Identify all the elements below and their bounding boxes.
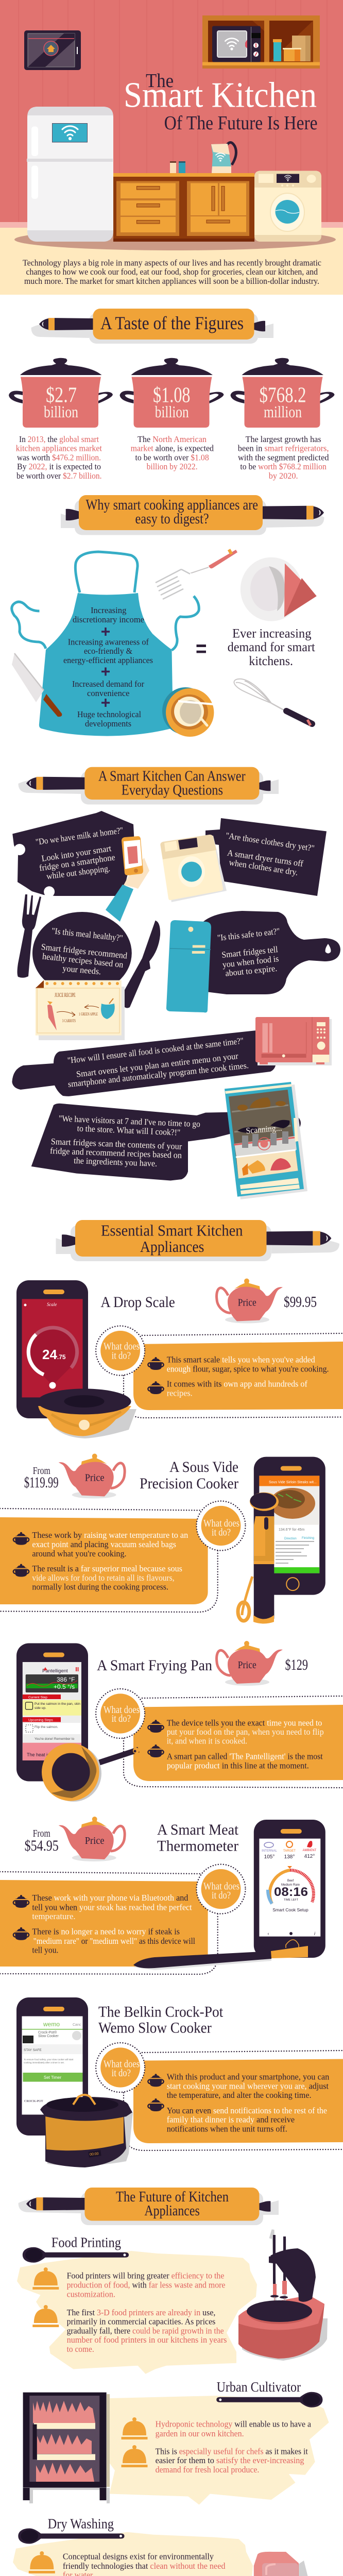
heading: Essential Smart Kitchen Appliances: Appliances — [140, 1238, 204, 1256]
price teapot — [217, 1279, 317, 1323]
icon: wall shelf with microwave — [202, 15, 320, 69]
price teapot: $129 — [285, 1656, 308, 1673]
list: demand factors — [63, 605, 153, 728]
icon: hand holding phone — [106, 836, 149, 922]
phone: pantelligent app — [16, 1643, 139, 1802]
phone: wemo app: CROCK-POT — [24, 2099, 43, 2103]
list: demand factors: Increased demand for — [72, 679, 144, 689]
caption: north america — [131, 434, 214, 471]
phone: scale app — [16, 1280, 136, 1438]
phone: sous vide app: Sous Vide Sirloin Steaks wit... — [269, 1481, 317, 1484]
icon: scale bowl — [37, 1388, 136, 1438]
panel: Urban Cultivator — [23, 2379, 329, 2505]
caption: global market: By 2022, it is expected to — [17, 462, 101, 471]
text: food printing: The first 3-D food printers are already in use, — [67, 2308, 215, 2317]
question: visitors: the ingredients you have. — [74, 1156, 157, 1168]
text: urban cultivator: demand for fresh local produce. — [156, 2465, 259, 2475]
list: sous vide features: normally lost during the cooking process. — [32, 1582, 168, 1592]
pot: 2.7 billion: $2.7 — [46, 384, 77, 408]
question: safe to eat: you when food is — [222, 954, 279, 970]
appliance title — [98, 2003, 224, 2036]
price teapot: From — [33, 1465, 50, 1477]
question: safe to eat — [166, 911, 340, 1012]
appliance title: Thermometer — [157, 1838, 238, 1855]
phone: pantelligent app: Pantelligent — [42, 1668, 68, 1674]
recipe card — [36, 980, 125, 1040]
price teapot: Price — [238, 1659, 256, 1671]
bubble: what does it do — [197, 1865, 245, 1914]
question: visitors: Smart fridges scan the contents of your — [50, 1137, 182, 1151]
phone: pantelligent app: Current Step — [28, 1696, 47, 1699]
question: healthy meal — [32, 912, 132, 1040]
list: sous vide features: exact point and placing vacuum sealed bags — [32, 1539, 176, 1549]
caption: north america: to be worth over $1.08 — [135, 452, 209, 463]
icon: apron — [12, 552, 199, 736]
list: demand factors: Increasing — [91, 605, 127, 615]
phone: sous vide app: 134.6°F for 45m — [279, 1528, 304, 1532]
list: slow cooker features: family that dinner is ready and receive — [167, 2115, 295, 2125]
text: food printing: gradually fall, there could be rapid growth in the — [67, 2326, 224, 2335]
heading: Why smart cooking appliances — [61, 495, 324, 535]
text: food printing: customization. — [67, 2290, 115, 2299]
caption: refrigerators — [238, 434, 329, 481]
icon: red oven — [255, 1017, 332, 1065]
icon: frying pan — [42, 1743, 139, 1802]
list: sous vide features — [13, 1530, 188, 1592]
list: slow cooker features: notifications when the unit turns off. — [167, 2124, 287, 2133]
phone: pantelligent app: Upcoming Steps — [28, 1719, 53, 1722]
bubble: what does it do: What does — [203, 1518, 239, 1529]
icon: whisk — [234, 679, 312, 725]
details panel — [0, 1880, 208, 1967]
caption: global market: was worth $476.2 million. — [17, 452, 101, 463]
caption: north america: billion by 2022. — [147, 462, 198, 471]
list: thermometer features — [13, 1893, 195, 1955]
panel: A Smart Frying Pan — [16, 1641, 343, 1802]
pot: 768.2 million — [231, 358, 335, 428]
panel: Dry Washing: Dry Washing — [48, 2516, 114, 2532]
list: slow cooker features: the temperature, and alter the cooking time. — [167, 2090, 311, 2100]
text: food printing: Food printers will bring greater efficiency to the — [67, 2271, 224, 2281]
phone: scale app: 24.75 — [42, 1347, 66, 1362]
price teapot: From — [33, 1828, 50, 1839]
list: slow cooker features: start cooking your meal wherever you are, adjust — [167, 2081, 329, 2091]
phone: wemo app: Set Timer — [44, 2075, 61, 2080]
caption: refrigerators: to be worth $768.2 million — [240, 462, 327, 471]
intro text: changes to how we cook our food, eat our food, shop for groceries, clean our kitchen, and — [26, 267, 318, 277]
phone: thermometer app: 138° — [284, 1854, 295, 1860]
price teapot — [217, 1641, 308, 1686]
question: healthy meal: "Is this meal healthy?" — [51, 926, 124, 943]
panel: Belkin Crock-Pot — [16, 1997, 343, 2167]
question: clothes dry: when clothes are dry. — [228, 857, 299, 877]
price teapot: $54.95 — [25, 1837, 59, 1854]
recipe card: 3 CARROTS — [62, 1019, 76, 1023]
question: milk: Look into your smart — [41, 843, 112, 863]
text: urban cultivator: garden in our own kitchen. — [156, 2429, 244, 2438]
heading: A Smart Kitchen Can Answer: A Smart Kitchen Can Answer — [98, 769, 246, 785]
caption: refrigerators: been in smart refrigerators, — [238, 444, 329, 453]
caption: global market: In 2013, the global smart — [19, 434, 99, 444]
details panel — [133, 1705, 343, 1781]
phone: thermometer app: Medium Rare — [281, 1884, 300, 1887]
list: thermometer features: tell you. — [32, 1945, 58, 1955]
phone: wemo app: cooking immediately after a timer is set. — [24, 2061, 64, 2064]
list: demand factors: eco-friendly & — [84, 646, 132, 656]
price teapot — [25, 1817, 125, 1861]
list: slow cooker features: You can even send notifications to the rest of the — [167, 2106, 327, 2115]
heading: Essential Smart Kitchen Appliances — [56, 1220, 339, 1261]
appliance title: A Smart Meat — [157, 1821, 239, 1838]
question: clothes dry: A smart dryer turns off — [227, 848, 304, 869]
list: sous vide features: around what you're cooking. — [32, 1549, 127, 1558]
phone: pantelligent app: side up. — [35, 1706, 46, 1710]
bubble: what does it do — [96, 1689, 145, 1738]
question: milk: "Do we have milk at home?" — [35, 825, 124, 847]
recipe card: JUICE RECIPE — [55, 991, 76, 998]
bubble: what does it do: it do? — [212, 1890, 231, 1901]
text: urban cultivator: Hydroponic technology will enable us to have a — [156, 2419, 311, 2429]
phone: wemo app: Canc — [73, 2023, 81, 2027]
bubble: what does it do: What does — [104, 2059, 140, 2070]
caption: north america: market alone, is expected — [131, 444, 214, 453]
question: cooked at same time: Smart ovens let you plan an entire menu on your — [76, 1051, 239, 1079]
phone: thermometer app: 105° — [264, 1854, 275, 1860]
list: thermometer features: tell you when your steak has reached the perfect — [32, 1902, 192, 1912]
icon: table knife — [121, 921, 160, 1008]
caption: refrigerators: by 2020. — [269, 471, 298, 481]
heading: Why smart cooking appliances: Why smart cooking appliances are — [85, 497, 258, 513]
list: demand factors: developments — [85, 719, 131, 728]
icon: food printer — [238, 2230, 328, 2361]
list: drop scale features — [148, 1354, 329, 1398]
text: food printing: primarily in commercial capacities. As prices — [67, 2317, 215, 2327]
phone: thermometer app: TIME LEFT — [284, 1899, 299, 1902]
question: healthy meal: healthy recipes based on — [42, 951, 124, 970]
list: frying pan features: put your food on the pan, when you need to flip — [167, 1727, 324, 1737]
bubble: what does it do: What does — [203, 1880, 239, 1892]
list: demand factors: convenience — [87, 688, 130, 698]
question: visitors: fridge and recommend recipes based on — [50, 1146, 182, 1160]
list: frying pan features: it, and when it is cooked. — [167, 1736, 247, 1745]
question: safe to eat: Smart fridges tell — [221, 944, 279, 960]
pot: 768.2 million: million — [264, 402, 302, 421]
bubble: what does it do: it do? — [112, 1713, 131, 1724]
heading: A Taste of the Figures: A Taste of the Figures — [100, 313, 244, 333]
phone: pantelligent app: You're done! Remember to — [35, 1737, 75, 1741]
panel: Urban Cultivator: Urban Cultivator — [217, 2379, 301, 2395]
heading: The Future of Kitchen Appliances: Appliances — [144, 2203, 200, 2219]
list: frying pan features: popular product in this line at the moment. — [167, 1760, 309, 1770]
pot: 1.08 billion: billion — [155, 402, 189, 421]
heading: The Future of Kitchen Appliances — [19, 2188, 279, 2225]
bubble: what does it do: it do? — [112, 2067, 131, 2079]
icon: slow cooker — [40, 2095, 133, 2167]
text: dry washing — [63, 2552, 226, 2576]
phone: sous vide app: Direction — [284, 1537, 297, 1540]
title: Smart Kitchen — [124, 76, 317, 115]
phone: pantelligent app: 386 °F — [57, 1676, 75, 1683]
heading: A Smart Kitchen Can Answer: Everyday Questions — [122, 782, 223, 799]
caption: global market — [16, 434, 102, 481]
phone: thermometer app: i — [314, 1931, 316, 1936]
bubble: what does it do: it do? — [112, 1350, 131, 1361]
text: urban cultivator — [156, 2419, 311, 2475]
icon: knife — [12, 653, 62, 717]
list: demand factors: Huge technological — [77, 709, 141, 719]
bubble: what does it do: What does — [104, 1341, 140, 1352]
panel: A Drop Scale — [16, 1279, 343, 1438]
phone: pantelligent app: The heat is — [27, 1752, 50, 1757]
pot: 768.2 million: $768.2 — [260, 384, 306, 408]
intro text — [23, 258, 321, 286]
bubble: what does it do — [96, 2043, 145, 2092]
details panel — [133, 1342, 343, 1410]
list: thermometer features: There is no longer a need to worry if steak is — [32, 1927, 180, 1937]
price teapot: Price — [85, 1472, 105, 1483]
question: clothes dry — [160, 818, 327, 902]
list: sous vide features: vide allows for food to retain all its flavours, — [32, 1573, 175, 1583]
panel: figure pots — [9, 358, 335, 481]
bubble: what does it do — [96, 1326, 145, 1376]
panel: A Smart Meat Thermometer — [0, 1817, 325, 1974]
price teapot: Price — [85, 1835, 105, 1846]
phone: wemo app: STAY SAFE — [24, 2048, 42, 2052]
intro text: much more. The market for smart kitchen appliances will soon be a billion-dollar industry. — [24, 276, 319, 286]
question: cooked at same time: smartphone and automatically program the cook times. — [67, 1060, 249, 1089]
list: slow cooker features: With this product and your smartphone, you can — [167, 2072, 330, 2082]
list: demand factors: energy-efficient appliances — [63, 655, 153, 665]
list: sous vide features: These work by raising water temperature to an — [32, 1530, 188, 1540]
appliance title: Wemo Slow Cooker — [98, 2020, 212, 2036]
phone: sous vide app: Finishing — [302, 1537, 314, 1540]
text: food printing: to come. — [67, 2344, 94, 2354]
result text: Ever increasing — [232, 627, 312, 641]
pot: 2.7 billion: billion — [44, 402, 78, 421]
icon: wall tablet — [24, 30, 81, 70]
phone: scale app: Scale — [47, 1302, 57, 1307]
question: healthy meal: Smart fridges recommend — [41, 942, 128, 961]
text: urban cultivator: This is especially useful for chefs as it makes it — [156, 2446, 308, 2456]
text: dry washing: friendly technologies that clean without the need — [63, 2561, 226, 2571]
question: milk: while out shopping. — [46, 863, 111, 882]
icon: slow cooker: 00:00 — [90, 2152, 99, 2157]
phone: pantelligent app: Flip the salmon. — [35, 1725, 58, 1729]
icon: cup on saucer — [162, 687, 214, 737]
question: visitors — [31, 1082, 307, 1199]
bubble: what does it do — [197, 1501, 245, 1551]
icon: scanning fridge — [225, 1082, 307, 1199]
heading: Why smart cooking appliances: easy to digest? — [135, 511, 209, 527]
heading: A Smart Kitchen Can Answer — [19, 767, 279, 805]
icon: plate with napkin — [241, 557, 317, 621]
list: demand factors: Increasing awareness of — [68, 637, 149, 647]
phone: thermometer app — [133, 1820, 325, 1970]
appliance title — [140, 1459, 238, 1492]
phone: thermometer app: TARGET — [283, 1850, 296, 1853]
appliance title: Precision Cooker — [140, 1475, 238, 1492]
list: slow cooker features — [148, 2072, 330, 2133]
pot: 1.08 billion: $1.08 — [153, 384, 191, 408]
phone: wemo app: To ensure food safety, your slow cooker will start — [24, 2058, 74, 2061]
pot: 2.7 billion — [9, 358, 113, 428]
icon: scanning fridge: Scanning... — [246, 1123, 282, 1136]
icon: immersion cooker — [238, 1493, 279, 1624]
icon: spatula — [156, 549, 237, 600]
result text — [228, 627, 315, 668]
heading: Essential Smart Kitchen Appliances: Essential Smart Kitchen — [101, 1222, 243, 1240]
phone: sous vide app — [238, 1457, 325, 1624]
phone: thermometer app: Smart Cook Setup — [272, 1907, 308, 1912]
price teapot — [24, 1454, 125, 1498]
panel: Food Printing: Food Printing — [52, 2235, 121, 2250]
appliance title — [157, 1821, 239, 1855]
panel: A Sous Vide Precision Cooker — [0, 1454, 325, 1624]
question: safe to eat: about to expire. — [225, 963, 278, 978]
appliance title: The Belkin Crock-Pot — [98, 2003, 224, 2020]
list: thermometer features: These work with your phone via Bluetooth and — [32, 1893, 188, 1903]
icon: dryer — [160, 835, 227, 902]
phone: thermometer app: ‹ — [268, 1931, 269, 1936]
bubble: what does it do: What does — [104, 1704, 140, 1716]
caption: refrigerators: with the segment predicted — [238, 452, 329, 463]
phone: wemo app — [16, 1997, 133, 2167]
question: milk: fridge on a smartphone — [39, 852, 116, 873]
list: drop scale features: enough flour, sugar, spice to what you're cooking. — [167, 1364, 329, 1374]
caption: global market: kitchen appliances market — [16, 444, 102, 453]
details panel — [133, 2059, 343, 2143]
question: cooked at same time — [12, 1017, 332, 1096]
hero kitchen scene — [0, 0, 343, 295]
panel: Dry Washing — [13, 2516, 331, 2576]
phone: thermometer app: INTERNAL — [262, 1850, 277, 1853]
caption: refrigerators: The largest growth has — [246, 434, 321, 444]
phone: wemo app: Crock-Pot® — [38, 2030, 57, 2035]
text: urban cultivator: easier for them to satisfy the ever-increasing — [156, 2455, 304, 2465]
list: thermometer features: "medium rare" or "medium well" as this device will — [33, 1936, 195, 1946]
phone: wemo app: wemo — [43, 2021, 60, 2028]
icon: meat probe — [133, 1946, 308, 1970]
phone: pantelligent app: +0.5 °/s — [54, 1683, 75, 1690]
price teapot: $119.99 — [24, 1474, 59, 1491]
list: thermometer features: temperature. — [32, 1911, 76, 1921]
list: drop scale features: It comes with its own app and hundreds of — [167, 1379, 307, 1389]
text: food printing: production of food, with far less waste and more — [67, 2280, 226, 2290]
text: food printing: number of food printers in our kitchens in years — [67, 2335, 227, 2345]
icon: blue fridge — [166, 920, 211, 1012]
list: drop scale features: recipes. — [167, 1388, 193, 1398]
icon: pink cubes — [226, 2552, 331, 2576]
appliance title: A Sous Vide — [169, 1459, 238, 1476]
question: safe to eat: "Is this safe to eat?" — [217, 926, 280, 943]
list: drop scale features: This smart scale tells you when you've added — [167, 1354, 315, 1364]
question: clothes dry: "Are those clothes dry yet?" — [225, 831, 315, 853]
caption: north america: The North American — [138, 434, 207, 444]
title: The — [146, 70, 174, 92]
caption: global market: be worth over $2.7 billion. — [16, 471, 102, 481]
title — [124, 70, 318, 134]
pot: 1.08 billion — [119, 358, 224, 428]
text: dry washing: Conceptual designs exist for environmentally — [63, 2552, 214, 2562]
question: milk — [12, 811, 149, 922]
result text: demand for smart — [228, 640, 315, 654]
icon: washing machine — [254, 171, 321, 242]
heading: A Taste of the Figures — [31, 309, 273, 344]
question: cooked at same time: "How will I ensure all food is cooked at the same time?" — [67, 1036, 244, 1065]
panel: Food Printing — [17, 2230, 328, 2374]
phone: pantelligent app: Put the salmon in the pan, skin — [35, 1702, 80, 1706]
list: frying pan features — [148, 1718, 324, 1770]
phone: wemo app: Slow Cooker — [38, 2035, 59, 2038]
equals sign — [197, 645, 206, 653]
phone: thermometer app: Beef — [287, 1879, 294, 1883]
panel: everyday questions — [12, 811, 340, 1199]
icon: fork — [18, 894, 41, 978]
list: frying pan features: The device tells you the exact time you need to — [167, 1718, 322, 1727]
appliance title: A Smart Frying Pan — [97, 1657, 212, 1674]
list: frying pan features: A smart pan called 'The Pantelligent' is the most — [167, 1752, 323, 1761]
question: visitors: to the store. What will I cook?!" — [77, 1123, 181, 1138]
phone: thermometer app: 08:16 — [274, 1885, 308, 1899]
list: demand factors: discretionary income — [73, 615, 144, 624]
price teapot: Price — [238, 1297, 256, 1309]
result text: kitchens. — [249, 654, 293, 668]
phone: thermometer app: 412° — [304, 1854, 315, 1859]
heading: The Future of Kitchen Appliances: The Future of Kitchen — [116, 2189, 229, 2205]
title: Of The Future Is Here — [164, 112, 318, 134]
question: visitors: "We have visitors at 7 and I've no time to go — [59, 1113, 200, 1129]
question: healthy meal: your needs. — [62, 963, 101, 976]
icon: kettle and spice jars — [170, 142, 236, 173]
text: food printing — [67, 2271, 227, 2354]
price teapot: $99.95 — [284, 1294, 317, 1311]
icon: kitchen cabinet — [113, 173, 254, 242]
icon: smart fridge — [27, 107, 113, 242]
panel: apron equation — [12, 549, 317, 737]
details panel — [0, 1517, 208, 1604]
list: sous vide features: The result is a far superior meal because sous — [32, 1564, 182, 1573]
recipe card: 1 GREEN APPLE — [79, 1012, 98, 1016]
bubble: what does it do: it do? — [212, 1527, 231, 1538]
intro text: Technology plays a big role in many aspects of our lives and has recently brought dramatic — [23, 258, 321, 268]
phone: thermometer app: AMBIENT — [303, 1849, 317, 1852]
appliance title: A Drop Scale — [100, 1294, 175, 1311]
icon: cultivator cabinet — [23, 2393, 110, 2503]
